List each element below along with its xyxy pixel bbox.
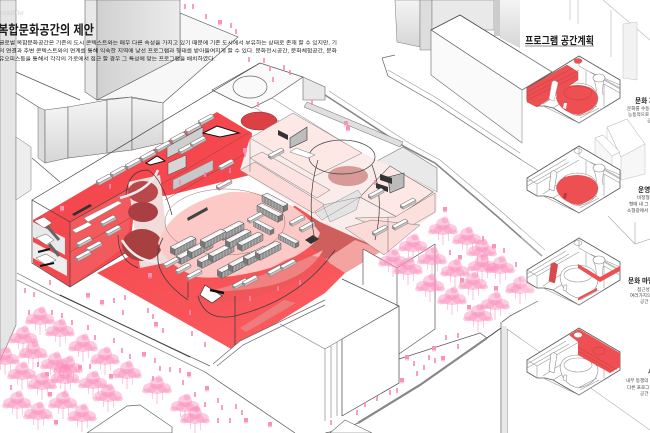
diagram 2: operation: 소형광에서 <box>627 207 648 214</box>
right column veil <box>521 0 650 433</box>
diagram 4: office: 공간 <box>640 390 649 396</box>
diagram 4: office <box>527 328 650 396</box>
red domes and ramp <box>118 170 172 268</box>
dark outline loops <box>158 238 335 369</box>
central pink ellipse plaza <box>158 189 330 302</box>
section title <box>0 11 94 38</box>
diagram 4: office: 내부 동쟁의 <box>626 377 648 384</box>
surrounding buildings: top centre <box>395 0 552 143</box>
building blocks on plaza <box>163 193 319 303</box>
diagram 2: operation <box>527 146 650 214</box>
diagram 3: culture yard <box>527 238 650 305</box>
heading: program space plan: 프로그램 공간계획 <box>525 34 594 47</box>
roads <box>17 55 545 433</box>
diagram 1: culture experience <box>527 56 650 123</box>
bottom buildings <box>87 301 650 433</box>
red ground floor <box>97 190 383 350</box>
diagram 2: operation: 형태 내 그 <box>629 200 648 208</box>
stairs on block side <box>34 217 59 266</box>
diagram 4: office: 다른 프로그 <box>627 384 649 391</box>
red block with upper floors <box>32 63 277 287</box>
site upper terrace <box>212 63 437 192</box>
intro text block <box>0 40 337 62</box>
section title: oos/80vr <box>1 11 24 17</box>
surrounding buildings: top right <box>570 0 650 244</box>
intro text block: 글로벌 복합문화공간은 기존의 도시 콘텍스트와는 매우 다른 속성을 가지고 있기 때문에 기존 도시에서 부유하는 상태로 존재 할 수 있지만, 기 <box>0 40 337 46</box>
section title: 복합문화공간의 제안 <box>0 22 94 38</box>
white building bottom centre <box>213 244 435 433</box>
diagram 3: culture yard: 공간 <box>640 298 649 304</box>
diagram 2: operation: 운영 <box>638 185 650 194</box>
intro text block: 유오피스등을 통해서 각각의 가로에서 접근 할 경우 그 특성에 맞는 프로그램을 배치하였다. <box>0 56 215 62</box>
intro text block: 의 연결과 주변 콘텍스트와의 연계를 통해 익숙한 지역에 낯선 프로그램과 형태를 받아들여지게 할 수 있다. 문화전시공간, 문화체험공간, 문화 <box>0 48 337 54</box>
surrounding buildings: top centre-left tower <box>38 0 238 163</box>
surrounding buildings: left <box>0 0 80 361</box>
pink people <box>10 4 517 428</box>
pink trees <box>0 216 535 433</box>
pink upper floors right <box>240 113 437 255</box>
